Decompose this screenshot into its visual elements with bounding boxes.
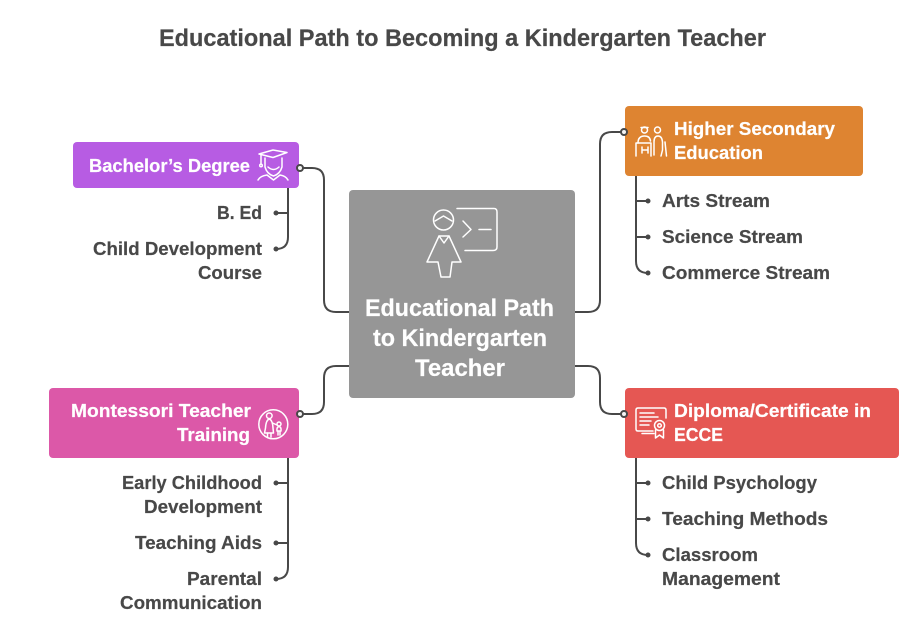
central label: Teacher — [415, 355, 505, 382]
header box — [49, 388, 299, 458]
central label — [365, 295, 554, 382]
header label: ECCE — [674, 425, 723, 445]
header label: Diploma/Certificate in — [674, 401, 871, 421]
endpoint node — [297, 411, 303, 417]
endpoint node — [297, 165, 303, 171]
item: Child Development Course — [93, 239, 278, 283]
branch lines — [636, 458, 648, 555]
item: Science Stream: Science Stream — [662, 227, 803, 247]
item: Early Childhood Development — [122, 473, 278, 517]
item: Child Development Course: Course — [198, 263, 262, 283]
central label: Educational Path — [365, 295, 554, 322]
header box — [625, 106, 863, 176]
item: Child Development Course: Child Development — [93, 239, 262, 259]
header label — [71, 401, 251, 445]
header label: Education — [674, 143, 763, 163]
item: B. Ed: B. Ed — [217, 203, 262, 223]
item: Classroom Management — [646, 545, 780, 589]
item: Early Childhood Development: Early Childhood — [122, 473, 262, 493]
item: Teaching Aids: Teaching Aids — [135, 533, 262, 553]
item: Classroom Management: Management — [662, 569, 780, 589]
branch lines — [636, 176, 648, 273]
panel: Higher Secondary Education — [621, 106, 863, 283]
item: Early Childhood Development: Development — [144, 497, 262, 517]
endpoint node — [621, 129, 627, 135]
item: Commerce Stream: Commerce Stream — [662, 263, 830, 283]
header label — [674, 401, 871, 445]
item: Classroom Management: Classroom — [662, 545, 758, 565]
item: Arts Stream: Arts Stream — [662, 191, 770, 211]
branch lines — [276, 188, 288, 249]
item: Parental Communication: Parental — [187, 569, 262, 589]
central box — [349, 190, 575, 398]
header label: Bachelor’s Degree — [89, 156, 250, 176]
title: Educational Path to Becoming a Kindergarten Teacher — [159, 25, 766, 52]
branch lines — [276, 458, 288, 579]
item: Child Psychology: Child Psychology — [662, 473, 817, 493]
icon: parent and child — [259, 410, 288, 439]
item: Parental Communication: Communication — [120, 593, 262, 613]
connector: center to Diploma/Certificate — [575, 366, 624, 414]
panel: Diploma/Certificate in ECCE — [621, 388, 899, 589]
header label — [674, 119, 835, 163]
panel: Bachelor's Degree — [73, 142, 303, 283]
header label: Training — [177, 425, 250, 445]
header box — [625, 388, 899, 458]
icon: certificate — [636, 408, 666, 438]
item: Teaching Methods: Teaching Methods — [662, 509, 828, 529]
connector: center to Montessori Teacher Training — [300, 366, 349, 414]
header label: Higher Secondary — [674, 119, 835, 139]
connector: center to Bachelor's Degree — [300, 168, 349, 312]
header label: Montessori Teacher — [71, 401, 251, 421]
item: Parental Communication — [120, 569, 278, 613]
endpoint node — [621, 411, 627, 417]
icon: graduate — [258, 150, 288, 180]
icon: two people — [636, 127, 666, 156]
panel: Montessori Teacher Training — [49, 388, 303, 613]
connector: center to Higher Secondary Education — [575, 132, 624, 312]
panel: central topic — [349, 190, 575, 398]
central label: to Kindergarten — [373, 325, 547, 352]
header box — [73, 142, 299, 188]
icon: teacher at board — [427, 208, 497, 277]
